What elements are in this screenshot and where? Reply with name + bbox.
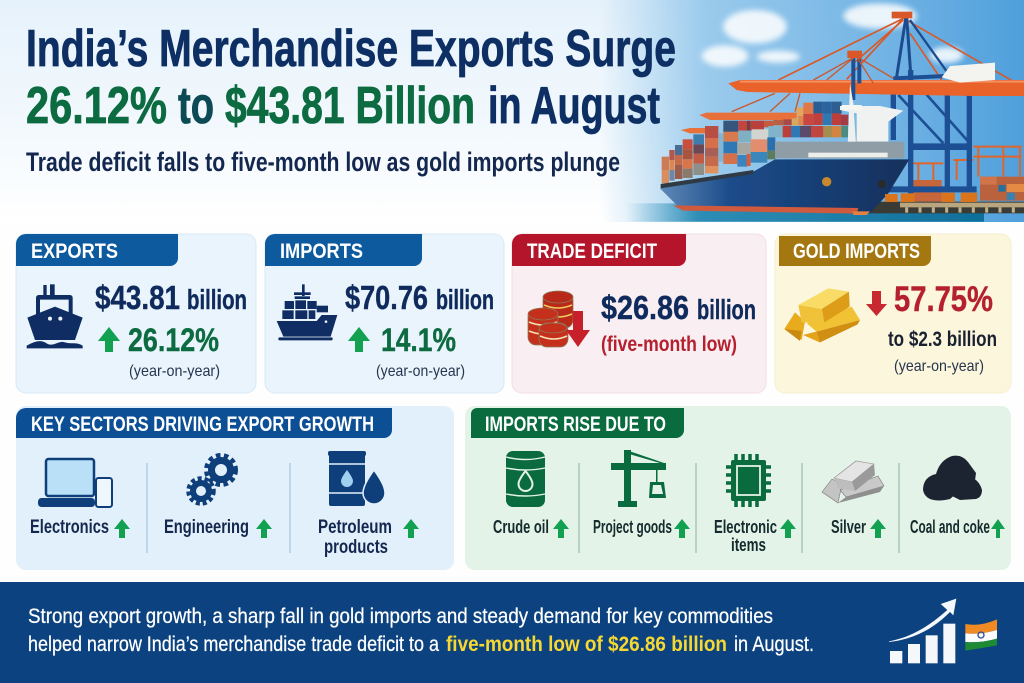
deficit value xyxy=(601,289,756,326)
sector: petroleum products xyxy=(318,517,419,558)
footer summary text: five-month low of $26.86 billion xyxy=(446,633,727,656)
deficit header xyxy=(512,234,686,266)
icon: oil barrel with drop xyxy=(328,451,385,506)
container stacks xyxy=(662,102,875,183)
icon: laptop and phone xyxy=(38,459,112,507)
exports header xyxy=(16,234,178,266)
icon: construction crane xyxy=(611,450,666,507)
panel: key sectors xyxy=(16,406,454,570)
panel: gold imports xyxy=(775,234,1011,393)
gold change: 57.75% xyxy=(894,280,993,319)
icon: ship front view xyxy=(27,284,83,348)
import: electronic items: Electronic xyxy=(714,517,777,537)
panel: imports rise xyxy=(465,406,1011,570)
sector: petroleum products: products xyxy=(324,537,388,558)
crane machine house xyxy=(892,12,995,83)
sector: engineering: Engineering xyxy=(164,517,249,538)
imports value: $70.76 xyxy=(345,279,428,316)
icon: green barrel xyxy=(506,451,545,507)
import: crude oil: Crude oil xyxy=(493,517,549,537)
import: electronic items xyxy=(714,517,796,555)
imports rise header: IMPORTS RISE DUE TO xyxy=(485,413,666,436)
dock containers xyxy=(912,177,1024,202)
imports rise header xyxy=(471,408,684,438)
imports growth xyxy=(348,322,456,358)
gold change xyxy=(866,280,993,319)
ship bridge superstructure xyxy=(775,83,904,158)
imports growth: 14.1% xyxy=(381,322,456,358)
yard tractors xyxy=(885,193,977,202)
key sectors header xyxy=(16,408,392,438)
header banner background xyxy=(0,0,1024,222)
icon: microchip xyxy=(726,454,771,507)
gold header xyxy=(779,236,931,266)
anchors xyxy=(822,177,886,188)
exports value: $43.81 xyxy=(95,279,180,316)
imports value xyxy=(345,279,494,316)
hull xyxy=(660,159,909,213)
subtitle: Trade deficit falls to five-month low as gold imports plunge xyxy=(26,147,620,177)
imports header xyxy=(265,234,422,266)
icon: growth chart xyxy=(889,599,956,663)
deficit value: $26.86 xyxy=(601,289,689,326)
icon: silver bars xyxy=(822,461,884,503)
import: electronic items: items xyxy=(731,535,766,555)
icon: coins with down arrow xyxy=(528,291,590,347)
second crane xyxy=(732,57,893,112)
panel: exports xyxy=(16,234,256,393)
water xyxy=(627,203,984,222)
footer summary text: in August. xyxy=(734,633,814,656)
panel: imports xyxy=(265,234,504,393)
title: India’s Merchandise Exports Surge xyxy=(26,20,676,78)
title: in August xyxy=(488,77,660,135)
title xyxy=(26,20,676,135)
icon: container ship xyxy=(277,284,337,340)
title: $43.81 Billion xyxy=(225,77,475,135)
far cranes xyxy=(913,147,1022,182)
gold amount: to $2.3 billion xyxy=(888,328,997,351)
crane boom xyxy=(728,80,1024,96)
big crane xyxy=(778,17,1017,193)
gold header: GOLD IMPORTS xyxy=(793,240,920,263)
waterline stripe xyxy=(673,205,858,214)
hero image: container ship and port cranes xyxy=(627,3,1024,222)
icon: gears xyxy=(188,456,236,504)
exports value: billion xyxy=(187,284,247,315)
title: 26.12% xyxy=(26,77,167,135)
quay xyxy=(870,202,1024,213)
gold note: (year-on-year) xyxy=(894,358,984,375)
imports header: IMPORTS xyxy=(280,240,363,263)
footer summary text: helped narrow India’s merchandise trade deficit to a xyxy=(28,633,439,656)
import: project goods: Project goods xyxy=(593,517,672,537)
icon: India flag xyxy=(965,619,997,651)
footer band xyxy=(0,582,1024,683)
title: to xyxy=(178,77,214,135)
footer summary text: Strong export growth, a sharp fall in gold imports and steady demand for key commodities xyxy=(28,605,773,628)
exports value xyxy=(95,279,247,316)
clouds xyxy=(702,3,963,67)
import: silver: Silver xyxy=(831,517,866,537)
footer summary text xyxy=(28,605,814,656)
key sectors header: KEY SECTORS DRIVING EXPORT GROWTH xyxy=(31,413,374,436)
deficit note: (five-month low) xyxy=(601,333,737,356)
imports value: billion xyxy=(436,284,494,315)
deficit header: TRADE DEFICIT xyxy=(527,240,657,263)
exports growth: 26.12% xyxy=(128,322,219,358)
deficit value: billion xyxy=(697,294,756,325)
exports header: EXPORTS xyxy=(31,240,118,263)
white strip under hero xyxy=(0,222,1024,582)
panel: trade deficit xyxy=(512,234,766,393)
sector: electronics: Electronics xyxy=(30,517,109,538)
sector: petroleum products: Petroleum xyxy=(318,517,392,538)
imports note: (year-on-year) xyxy=(376,363,465,380)
icon: coal xyxy=(923,456,982,500)
icon: gold bars xyxy=(784,288,860,342)
exports growth xyxy=(98,322,219,358)
exports note: (year-on-year) xyxy=(129,363,220,380)
